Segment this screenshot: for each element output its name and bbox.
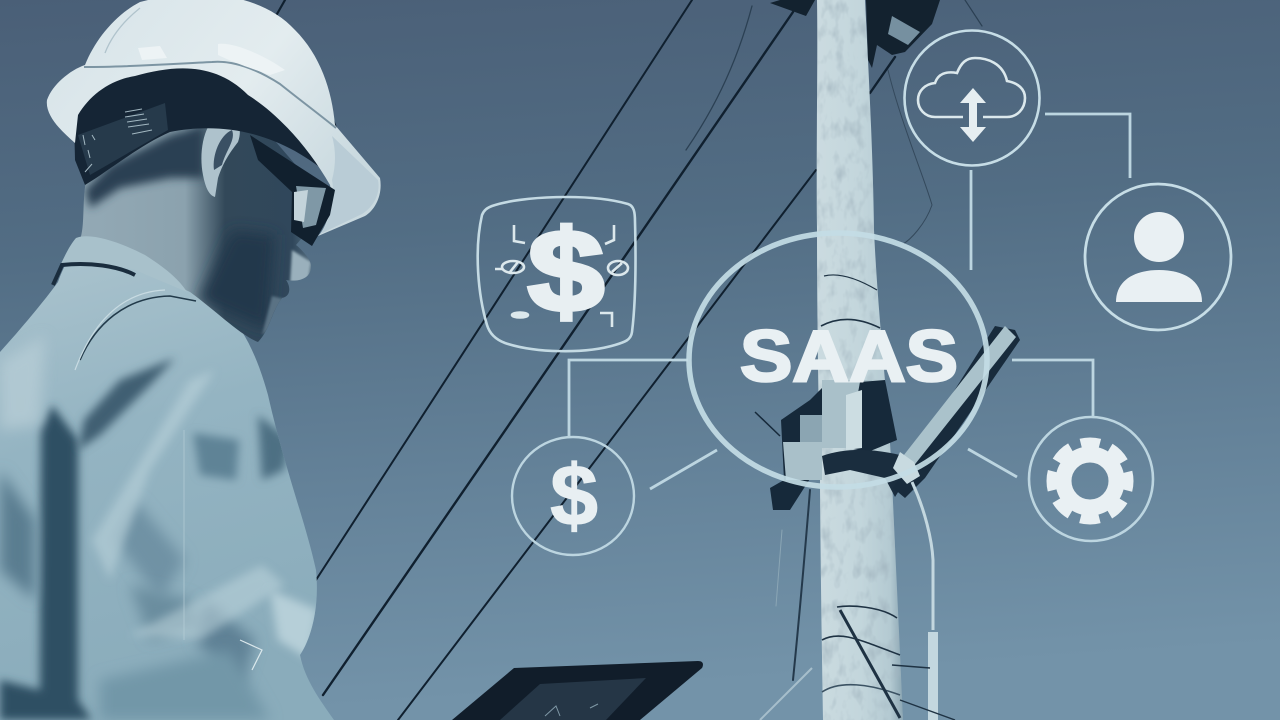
conduit pipe: [760, 482, 955, 720]
mid equipment on pole: [755, 326, 1020, 510]
connector saas to gear: [1012, 360, 1093, 418]
worker neck and face: [81, 128, 311, 342]
pole shaft: [817, 0, 903, 720]
connector cloud to user: [1045, 114, 1130, 178]
dollar circle: [512, 437, 634, 555]
connector saas to dollar panel: [569, 360, 688, 437]
utility pole: [816, 0, 903, 720]
hat slot left: [138, 46, 167, 60]
panel frame: [478, 197, 636, 351]
centre box: [848, 380, 897, 452]
diagonal arm: [893, 326, 1020, 498]
connector saas to small dollar: [650, 450, 717, 489]
user head: [1134, 212, 1184, 262]
user body: [1116, 270, 1202, 302]
bandage wrap: [822, 380, 888, 448]
icon: gear: [1029, 417, 1153, 541]
lower strap: [822, 450, 912, 497]
frame marks: [495, 225, 628, 327]
worker ear: [201, 115, 240, 197]
worker shirt: [0, 235, 334, 720]
connector cloud to saas: [970, 170, 972, 270]
hard hat: [47, 0, 381, 236]
worker figure: [0, 0, 703, 720]
icon: dollar panel: [478, 197, 636, 351]
dollar glyph small: $: [550, 448, 598, 544]
gear hub: [1064, 454, 1116, 508]
saas heading: SAAS: [740, 317, 958, 397]
connector lines: [569, 114, 1130, 489]
cloud circle: [904, 30, 1040, 166]
hat slot right: [218, 44, 285, 75]
strap detail: [78, 103, 168, 175]
gear teeth: [1052, 443, 1128, 519]
tablet: [452, 661, 703, 720]
pole bands: [821, 275, 900, 718]
power lines: [277, 0, 982, 720]
dollar glyph: $: [528, 206, 604, 336]
under brim: [320, 136, 379, 234]
helmet suspension band: [74, 55, 345, 210]
icon: small dollar: [512, 437, 634, 555]
icon: cloud transfer: [904, 30, 1040, 166]
transfer arrow: [960, 88, 986, 142]
left bracket: [770, 388, 822, 510]
icon: user: [1085, 184, 1231, 330]
shirt folds: [0, 290, 318, 720]
pole texture: [817, 0, 892, 716]
user circle: [1085, 184, 1231, 330]
ring outline: [689, 233, 987, 487]
connector gear to saas: [968, 449, 1017, 477]
cloud outline: [918, 58, 1025, 117]
gear circle: [1029, 417, 1153, 541]
hat ridge: [105, 8, 140, 53]
hat brim shadow: [84, 62, 336, 128]
safety glasses: [250, 135, 335, 246]
central saas ring: [689, 233, 987, 487]
ear shadow: [214, 130, 233, 170]
worker collar: [60, 236, 187, 292]
top equipment on pole: [770, 0, 940, 68]
lanyard: [53, 264, 135, 285]
